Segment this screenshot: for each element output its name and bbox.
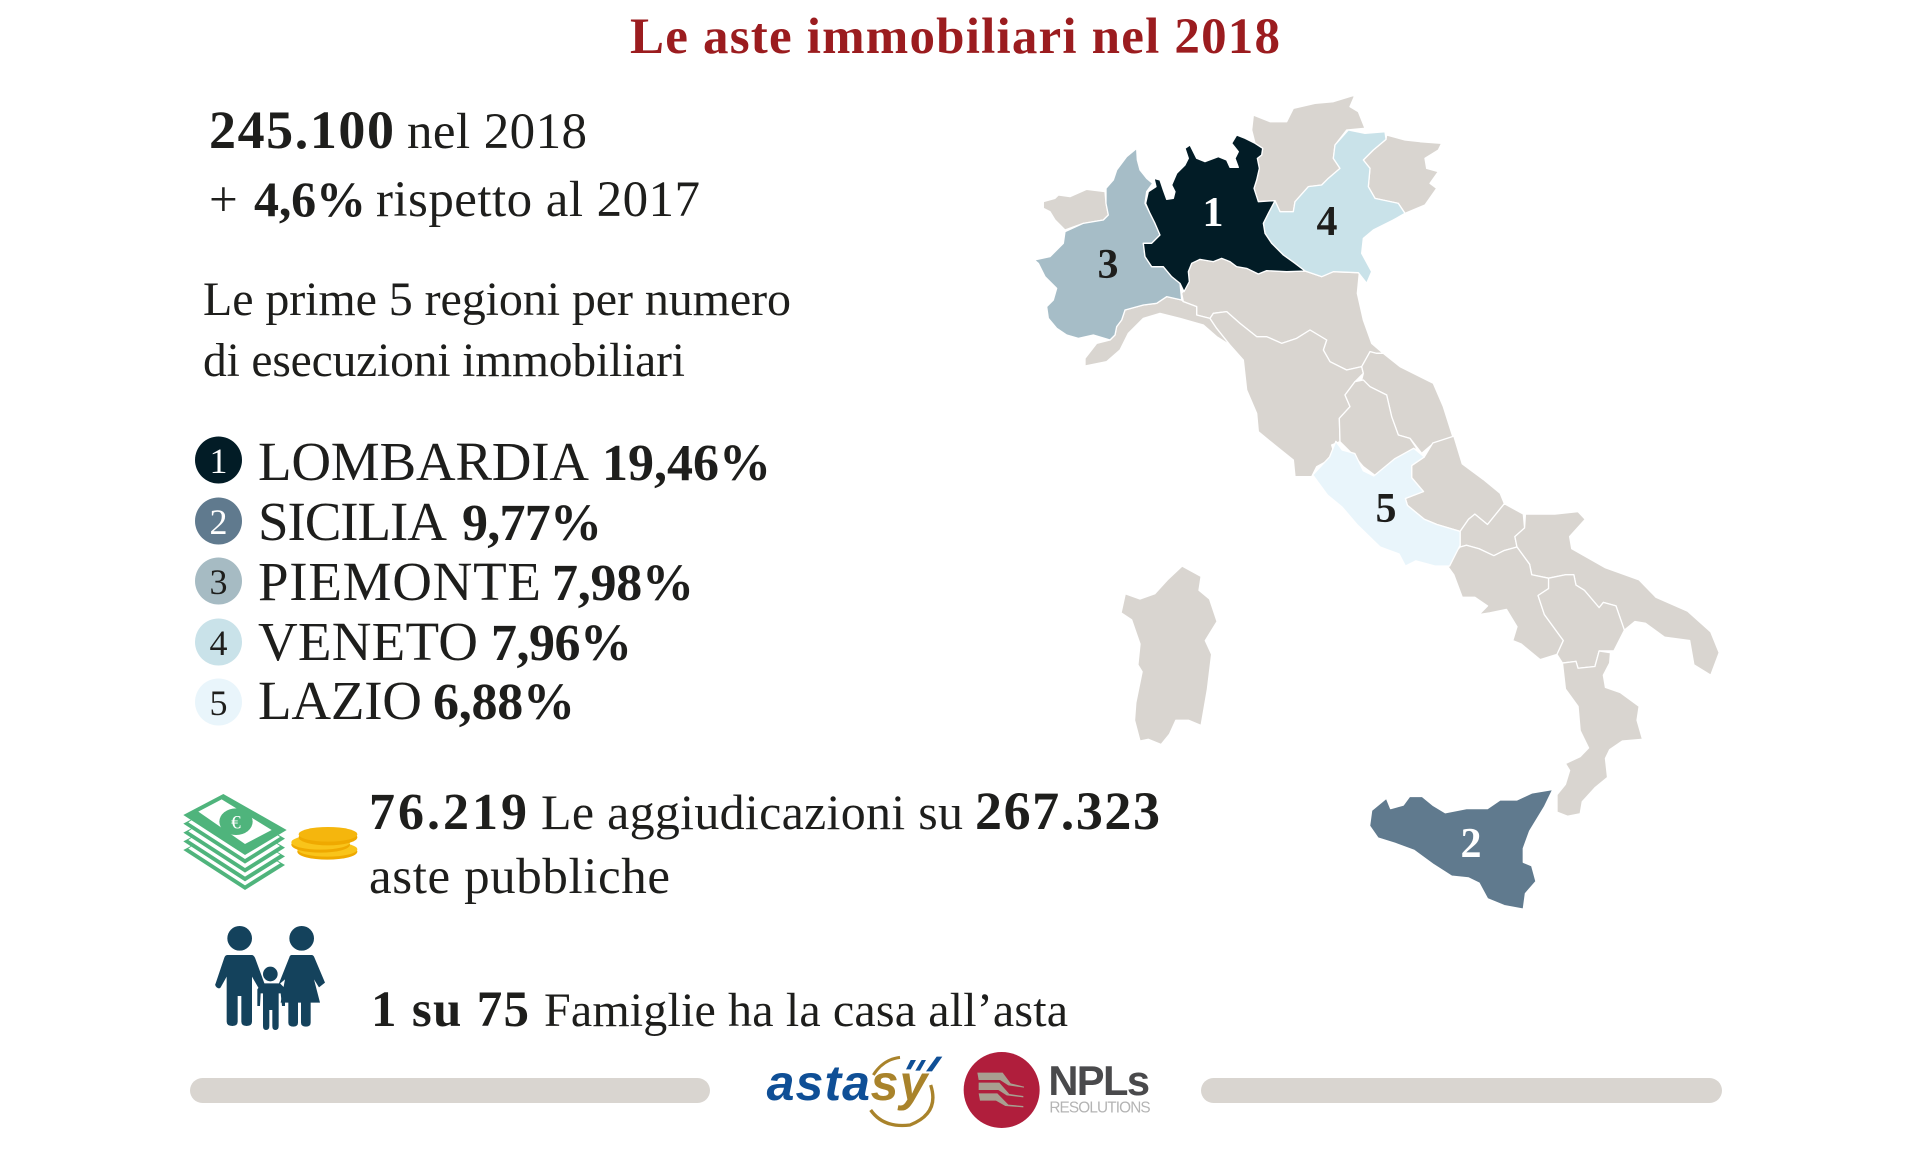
logo: astasy: sy [871, 1055, 930, 1111]
subtitle: top five regions [203, 273, 791, 387]
rank 3 Piemonte: PIEMONTE [258, 551, 541, 612]
logo: NPLs Resolutions: RESOLUTIONS [1049, 1099, 1151, 1116]
rank 2 Sicilia: 2 [210, 502, 228, 542]
region: Abruzzo [1405, 436, 1504, 531]
coins [291, 827, 357, 860]
region: Calabria [1557, 651, 1643, 816]
region: Umbria [1339, 380, 1417, 477]
map number 4: 4 [1316, 199, 1338, 245]
stat: total auctions: 245.100 [209, 100, 394, 160]
region: Trentino-Alto Adige [1252, 95, 1365, 212]
map number 1: 1 [1202, 190, 1224, 236]
rank 2 Sicilia [195, 491, 602, 552]
logo: NPLs Resolutions: NPLs [1048, 1057, 1150, 1104]
region: Lombardia [1143, 135, 1305, 292]
region: Sardegna [1121, 566, 1217, 744]
rank 3 Piemonte: 3 [210, 562, 228, 602]
stat: total auctions: nel 2018 [407, 104, 587, 160]
rank 5 Lazio: 6,88% [433, 674, 575, 731]
region: Liguria [1085, 297, 1230, 366]
stat: awards on public auctions [369, 781, 1160, 905]
stat: change on 2017: + [209, 172, 238, 228]
rank 3 Piemonte [195, 551, 694, 612]
region: Campania [1447, 545, 1563, 660]
rank 4 Veneto: 4 [210, 623, 228, 663]
region: Puglia [1515, 512, 1719, 675]
region: Marche [1362, 352, 1453, 453]
rank 4 Veneto: VENETO [258, 611, 478, 672]
rank 2 Sicilia: 9,77% [462, 495, 602, 552]
region: Valle d'Aosta [1043, 189, 1108, 230]
logo: astasy: asta [767, 1055, 870, 1111]
region: Basilicata [1538, 575, 1624, 668]
region: Friuli-Venezia Giulia [1363, 135, 1442, 213]
rank 5 Lazio: 5 [210, 683, 228, 723]
rank 1 Lombardia [195, 431, 771, 492]
map number 5: 5 [1376, 486, 1396, 532]
stat: one family in 75: 1 su 75 [371, 982, 529, 1038]
region: Emilia-Romagna [1182, 258, 1383, 370]
region: Piemonte [1034, 148, 1182, 340]
icon: banknotes and coins: € [231, 813, 241, 834]
stat: awards on public auctions: aste pubbliche [369, 849, 670, 905]
stat: awards on public auctions: 76.219 [369, 784, 527, 841]
rank 5 Lazio [195, 670, 575, 731]
logo: astasy [767, 1055, 942, 1126]
rank 4 Veneto: 7,96% [491, 615, 632, 672]
icon: banknotes and coins [183, 794, 357, 890]
rank 1 Lombardia: LOMBARDIA [258, 431, 589, 492]
stat: change on 2017 [209, 171, 700, 228]
map number 2: 2 [1460, 821, 1482, 867]
stat: awards on public auctions: Le aggiudicazioni su [541, 784, 963, 840]
stat: awards on public auctions: 267.323 [975, 781, 1160, 841]
stat: change on 2017: 4,6% [254, 171, 366, 227]
rank 3 Piemonte: 7,98% [552, 555, 694, 612]
title: Le aste immobiliari nel 2018 [630, 9, 1280, 65]
region: Lazio [1313, 441, 1460, 566]
region: Sicilia [1370, 790, 1553, 909]
map number 3: 3 [1098, 242, 1118, 288]
rank 4 Veneto [195, 611, 632, 672]
footer bar left [190, 1078, 710, 1103]
logo: NPLs Resolutions [964, 1052, 1151, 1128]
rank 1 Lombardia: 19,46% [602, 435, 771, 492]
stat: one family in 75: Famiglie ha la casa all’asta [544, 984, 1068, 1037]
map of Italy [1034, 95, 1719, 909]
rank 5 Lazio: LAZIO [258, 670, 422, 731]
region: Molise [1460, 504, 1525, 556]
footer bar right [1201, 1078, 1722, 1103]
icon: family [215, 926, 325, 1030]
rank 2 Sicilia: SICILIA [258, 491, 447, 552]
region: Toscana [1210, 312, 1363, 477]
stat: total auctions [209, 100, 587, 160]
stat: change on 2017: rispetto al 2017 [376, 172, 700, 228]
subtitle: top five regions: Le prime 5 regioni per numero [203, 273, 791, 326]
rank 1 Lombardia: 1 [210, 441, 228, 481]
regional ranking list [195, 431, 771, 731]
region: Veneto [1263, 130, 1405, 283]
subtitle: top five regions: di esecuzioni immobiliari [203, 335, 685, 387]
